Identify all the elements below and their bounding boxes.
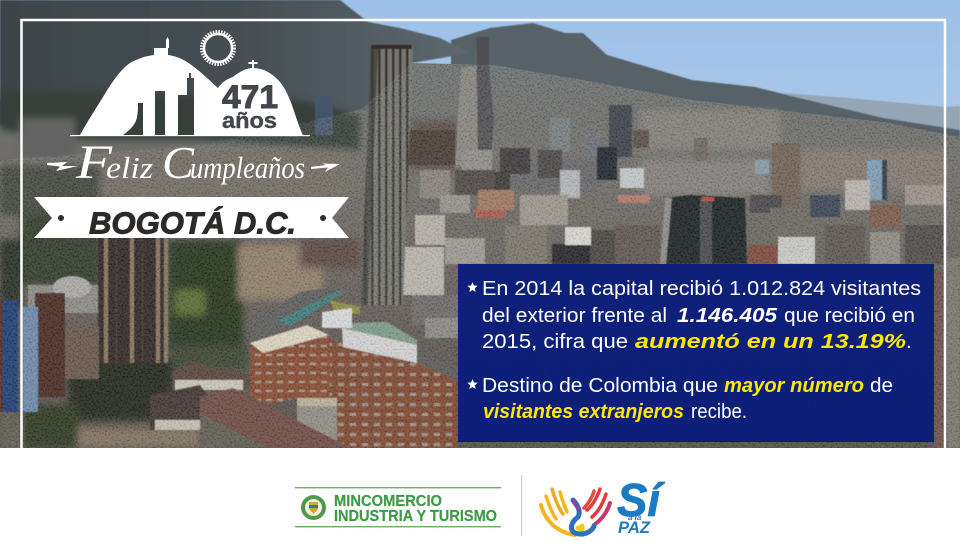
text: a la: a la (628, 513, 642, 522)
left mountain (0, 0, 470, 130)
icon: sun (202, 32, 234, 64)
icon: right spark (311, 164, 340, 172)
greeting: Feliz Cumpleaños: C (162, 137, 195, 188)
low house (173, 362, 250, 388)
divider (521, 475, 522, 536)
text: Sí: Sí (617, 474, 665, 526)
icon: Guadalupe statue (248, 60, 258, 69)
text: second fact: de (870, 374, 893, 397)
white frame (22, 20, 945, 448)
greeting: Feliz Cumpleaños (47, 136, 340, 189)
road and plaza (245, 286, 340, 340)
text: first fact: del exterior frente al (482, 304, 667, 327)
penthouse (342, 328, 417, 363)
text: first fact: 1.146.405 (677, 304, 778, 327)
icon: star 2 (467, 379, 478, 389)
greeting: Feliz Cumpleaños: F (75, 136, 113, 189)
tower: Fonade (660, 195, 747, 264)
number 471: 471 (222, 79, 278, 115)
distant mountains (782, 93, 960, 130)
text: first fact (482, 277, 921, 353)
icon: national seal (301, 495, 326, 520)
logo: Sí a la Paz (541, 474, 665, 537)
text: PAZ: PAZ (618, 518, 651, 537)
tower: Colpatria (361, 45, 413, 305)
text: second fact: visitantes extranjeros (483, 400, 684, 423)
city noise texture (0, 60, 960, 448)
logo: hills, sun and 471 años (70, 32, 310, 136)
label años: años (222, 108, 277, 133)
text: first fact: que recibió en (784, 304, 915, 327)
concrete block (297, 398, 337, 442)
logo: Mincomercio (295, 487, 501, 527)
icon: Monserrate hill with skyline cutouts (80, 37, 303, 135)
text: second fact (482, 374, 893, 423)
dome and left buildings (28, 285, 98, 313)
icon: star 1 (467, 282, 478, 292)
ribbon: Bogotá D.C. (34, 197, 349, 240)
foreground roof (200, 388, 345, 448)
icon: left spark (47, 162, 78, 171)
logo: Mincomercio: INDUSTRIA Y TURISMO (334, 508, 497, 525)
brick building, left wing (250, 335, 330, 430)
tower: Bacatá (455, 37, 494, 167)
text: first fact: aumentó en un 13.19% (635, 330, 906, 353)
tower: dark left building (98, 205, 168, 363)
text: first fact: 2015, cifra que (482, 330, 628, 353)
central mountains (451, 23, 960, 145)
mid-town buildings (0, 37, 960, 448)
city base (0, 63, 960, 448)
brick building, right wing (330, 340, 457, 448)
footer band (0, 448, 960, 560)
panel: visitor facts (458, 264, 934, 442)
greeting: Feliz Cumpleaños: eliz (106, 150, 153, 185)
hillside and left blotches (0, 90, 945, 450)
ribbon: Bogotá D.C.: BOGOTÁ D.C. (89, 206, 296, 240)
text: second fact: mayor número (724, 374, 864, 397)
logo: Mincomercio: MINCOMERCIO (334, 493, 442, 510)
text: first fact: En 2014 la capital recibió 1.012.824 visitantes (482, 277, 921, 300)
text: second fact: recibe. (691, 400, 747, 423)
text: second fact: Destino de Colombia que (482, 374, 718, 397)
white roof (250, 325, 329, 353)
text: first fact: . (906, 330, 912, 353)
icon: hands and dove (541, 489, 610, 535)
greeting: Feliz Cumpleaños: umpleaños (190, 150, 305, 185)
